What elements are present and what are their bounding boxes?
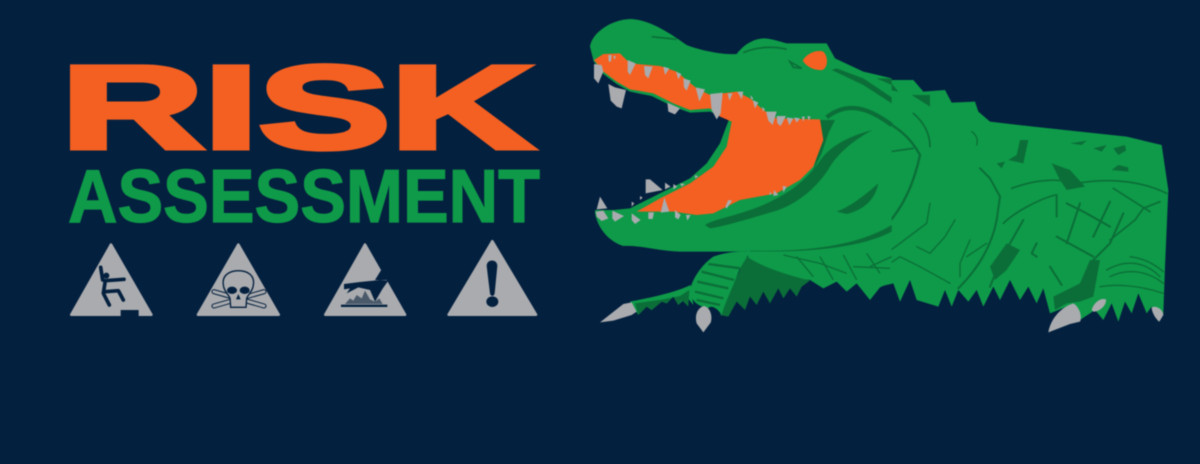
icon: exclamation mark [449, 241, 536, 315]
hazard icons row [71, 241, 536, 316]
head shading lines [652, 37, 892, 252]
icon: skull and crossbones [198, 245, 279, 315]
crocodile illustration [573, 19, 1168, 332]
claws [600, 302, 711, 332]
subtitle: ASSESSMENT: ASSESSMENT [68, 154, 540, 238]
icon: hand and hot surface [325, 245, 413, 315]
forearm [630, 285, 693, 315]
rear claws [1048, 299, 1163, 332]
icon: slip and fall [71, 245, 151, 316]
teeth [594, 55, 811, 224]
front leg [690, 251, 750, 315]
title: RISK: RISK [61, 42, 533, 174]
chest underside [747, 240, 892, 300]
dark underside of neck [720, 253, 810, 317]
croc body rear [880, 80, 1168, 332]
croc head, neck, leg and mouth [573, 19, 892, 332]
eye [803, 51, 827, 70]
croc head silhouette [590, 19, 892, 252]
mouth interior [594, 53, 823, 215]
open mouth gap [573, 60, 729, 210]
